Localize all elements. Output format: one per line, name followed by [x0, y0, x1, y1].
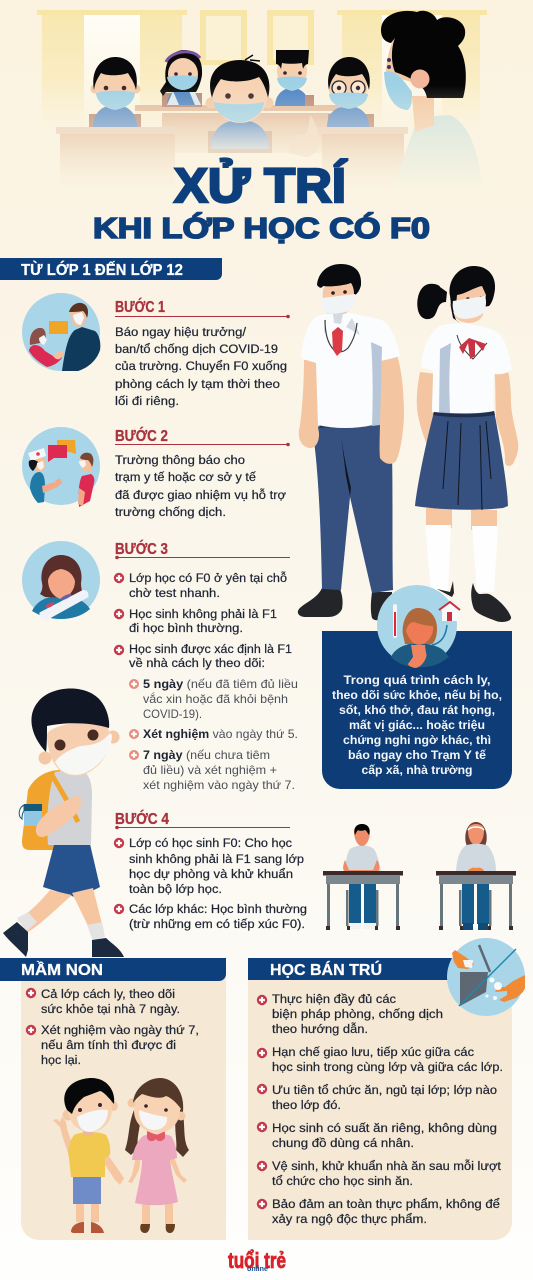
step 4 text: Các lớp khác: Học bình thường — [129, 902, 307, 916]
illustration: girl at desk — [436, 822, 516, 930]
icon: cleaning and hand washing — [447, 938, 525, 1016]
illustration: boy at desk — [323, 824, 403, 930]
step 2 text: trường chống dịch. — [115, 505, 226, 519]
boarding bullets: học sinh trong cùng lớp và giữa các lớp. — [272, 1060, 503, 1074]
illustration: classroom with masked pupils and teacher — [0, 10, 533, 197]
step 2 heading — [115, 427, 290, 446]
boarding bullets: Hạn chế giao lưu, tiếp xúc giữa các — [272, 1045, 474, 1059]
step 4 text — [114, 836, 307, 931]
teacher — [381, 11, 484, 195]
title: XỬ TRÍ — [174, 158, 348, 213]
boarding bullets — [257, 992, 503, 1226]
step 3 text: xét nghiệm vào ngày thứ 7. — [143, 778, 295, 792]
step 3 text — [114, 570, 298, 792]
callout text: theo dõi sức khỏe, nếu bị ho, — [332, 688, 502, 702]
boarding bullets: Học sinh có suất ăn riêng, không dùng — [272, 1121, 497, 1135]
callout text: sốt, khó thở, đau rát họng, — [339, 703, 495, 717]
step 4 text: Lớp có học sinh F0: Cho học — [129, 836, 292, 850]
illustration: two small children — [53, 1078, 189, 1233]
callout text — [332, 673, 502, 777]
kindergarten bullets: sức khỏe tại nhà 7 ngày. — [41, 1002, 180, 1016]
boarding bullets: Vệ sinh, khử khuẩn nhà ăn sau mỗi lượt — [272, 1158, 502, 1173]
step 1 text: lối đi riêng. — [115, 394, 179, 408]
logo: Tuoi Tre Online: tuổi trẻ — [228, 1248, 286, 1273]
pupil 1 — [89, 57, 141, 128]
boarding header: HỌC BÁN TRÚ — [270, 961, 382, 979]
pupil 5 with glasses — [327, 57, 374, 128]
boarding bullets: Thực hiện đầy đủ các — [272, 992, 396, 1006]
icon: feverish student — [377, 585, 460, 668]
step 3 text: vắc xin hoặc đã khỏi bệnh — [143, 691, 288, 706]
kindergarten header: MẦM NON — [21, 962, 103, 979]
title: KHI LỚP HỌC CÓ F0 — [93, 211, 430, 245]
callout text: báo ngay cho Trạm Y tế — [348, 748, 486, 762]
boarding bullets: chung đồ dùng cá nhân. — [272, 1136, 414, 1150]
step 1 text: ban/tổ chống dịch COVID-19 — [115, 342, 278, 356]
step 4 heading: BƯỚC 4 — [115, 810, 169, 828]
kindergarten header — [0, 958, 226, 981]
boarding bullets: Bảo đảm an toàn thực phẩm, không để — [272, 1197, 500, 1211]
illustration: boy in school uniform — [298, 264, 404, 620]
step 3 text: Xét nghiệm vào ngày thứ 5. — [143, 727, 298, 741]
icon: step 2 nurse and student — [22, 427, 100, 507]
boarding bullets: theo hướng dẫn. — [272, 1021, 368, 1036]
kindergarten bullets: nếu âm tính thì được đi — [41, 1038, 176, 1052]
back desks — [162, 113, 337, 153]
icon: step 1 people talking — [22, 293, 100, 371]
step 4 text: toàn bộ lớp học. — [129, 882, 222, 896]
step 3 text: 7 ngày (nếu chưa tiêm — [143, 748, 270, 762]
step 3 text: 5 ngày (nếu đã tiêm đủ liều — [143, 677, 298, 691]
panel: kindergarten — [0, 958, 226, 1240]
kindergarten bullets: Xét nghiệm vào ngày thứ 7, — [41, 1023, 199, 1037]
illustration: girl in school uniform — [415, 266, 518, 622]
step 3 heading: BƯỚC 3 — [115, 540, 168, 558]
step 1 text: của trường. Chuyển F0 xuống — [115, 359, 287, 373]
title — [93, 158, 430, 245]
step 2 text — [115, 453, 286, 519]
step 1 text: phòng cách ly tạm thời theo — [115, 377, 280, 391]
step 4 text: (trừ những em có tiếp xúc F0). — [129, 917, 305, 931]
front desks — [60, 133, 175, 188]
step 1 heading: BƯỚC 1 — [115, 298, 165, 316]
illustration: walking boy with backpack — [3, 689, 124, 957]
step 3 text: Học sinh được xác định là F1 — [129, 642, 292, 656]
step 3 text: về nhà cách ly theo dõi: — [129, 656, 265, 670]
pupil 3 front — [206, 55, 274, 153]
step 1 text: Báo ngay hiệu trưởng/ — [115, 325, 247, 339]
callout panel: symptoms advice — [322, 585, 512, 789]
fade overlay — [0, 85, 533, 197]
logo: Tuoi Tre Online: online — [247, 1266, 268, 1273]
step 3 text: đủ liều) và xét nghiệm + — [143, 763, 277, 777]
pupil 4 — [275, 50, 314, 106]
kindergarten bullets — [26, 987, 199, 1067]
step 3 text: Học sinh không phải là F1 — [129, 607, 277, 621]
boy — [53, 1078, 124, 1233]
step 3 text: chờ test nhanh. — [129, 586, 220, 600]
step 2 text: đã được giao nhiệm vụ hỗ trợ — [115, 487, 286, 502]
icon: step 3 student with test kit — [22, 541, 100, 620]
step 1 heading — [115, 298, 290, 318]
step 3 text: Lớp học có F0 ở yên tại chỗ — [129, 570, 287, 585]
step 1 text — [115, 325, 287, 408]
boarding bullets: xảy ra ngộ độc thực phẩm. — [272, 1212, 427, 1226]
step 3 text: đi học bình thường. — [129, 621, 243, 635]
step 2 heading: BƯỚC 2 — [115, 427, 168, 445]
step 2 text: Trường thông báo cho — [115, 453, 245, 467]
step 2 text: trạm y tế hoặc cơ sở y tế — [115, 470, 256, 484]
step 4 text: học dự phòng và khử khuẩn — [129, 867, 293, 881]
callout text: chứng nghi ngờ khác, thì — [343, 733, 491, 747]
callout text: mất vị giác... hoặc triệu — [349, 718, 485, 732]
kindergarten bullets: Cả lớp cách ly, theo dõi — [41, 987, 175, 1001]
step 3 text: COVID-19). — [143, 707, 202, 721]
section header: grade 1 to 12: TỪ LỚP 1 ĐẾN LỚP 12 — [21, 261, 183, 279]
boarding bullets: biện pháp phòng, chống dịch — [272, 1007, 443, 1021]
step 3 heading — [115, 540, 290, 559]
callout text: cấp xã, nhà trường — [362, 763, 472, 777]
boarding bullets: tổ chức cho học sinh ăn. — [272, 1174, 413, 1188]
boarding bullets: theo lớp đó. — [272, 1098, 341, 1112]
step 4 heading — [115, 810, 290, 829]
pupil 2 — [160, 50, 202, 107]
boarding header — [248, 958, 460, 980]
boarding bullets: Ưu tiên tổ chức ăn, ngủ tại lớp; lớp nào — [272, 1083, 497, 1097]
step 4 text: sinh không phải là F1 sang lớp — [129, 852, 304, 866]
section header: grade 1 to 12 — [0, 258, 222, 280]
callout text: Trong quá trình cách ly, — [344, 673, 490, 687]
panel: boarding — [248, 938, 525, 1240]
girl — [125, 1078, 189, 1233]
kindergarten bullets: học lại. — [41, 1053, 81, 1067]
